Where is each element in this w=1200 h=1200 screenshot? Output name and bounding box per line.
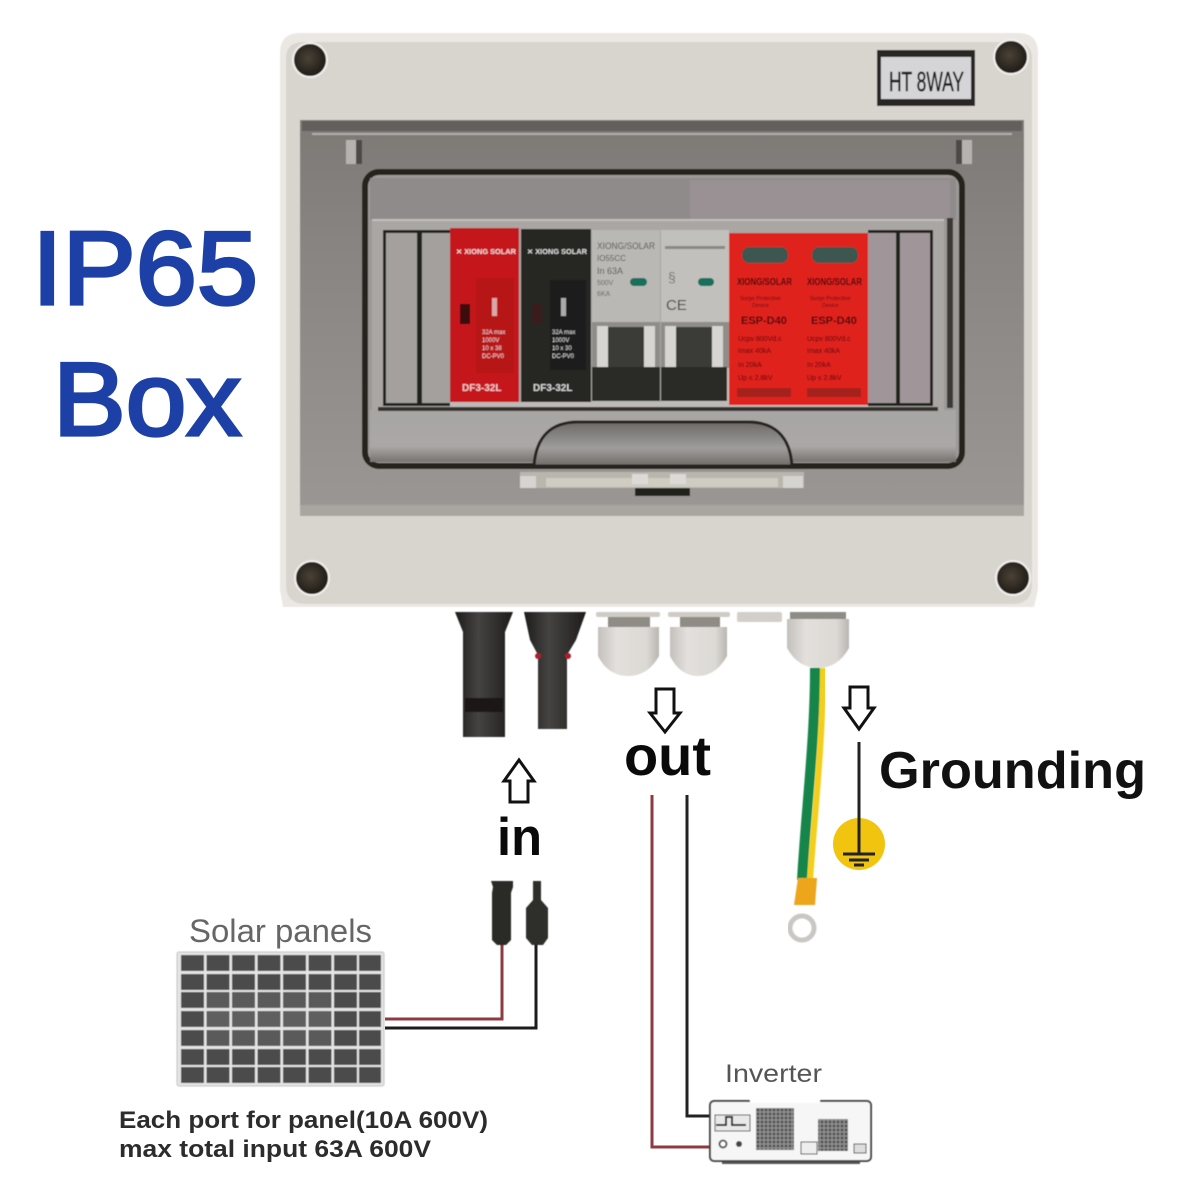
module: DC circuit breaker pole 2: CE [666,297,687,314]
module: surge protective device 2: Device [822,303,839,309]
din rail slots right [868,218,953,408]
module: surge protective device 1: Imax 40kA [738,348,771,355]
window handle arch [534,422,792,466]
module: black surge breaker [521,229,591,402]
window latch [520,472,804,496]
title: IP65 Box: Box [53,342,241,458]
solar panel [177,952,384,1086]
module: surge protective device 1: Ucpv 800Vd.c [738,336,782,343]
module: DC circuit breaker pole 1 [592,230,660,402]
panel port specification: Each port for panel(10A 600V) [119,1107,488,1134]
module: surge protective device 2: Ucpv 800Vd.c [807,336,851,343]
panel wires to connectors [385,944,536,1028]
cable gland 1 [596,612,660,676]
label: Grounding: Grounding [879,742,1146,800]
module: surge protective device 1: ESP-D40 [741,315,787,327]
model label plate: HT 8WAY [889,66,964,97]
arrow: in [504,760,534,802]
module: DC circuit breaker pole 1: IO55CC [597,254,626,263]
module: black surge breaker: 32A max [552,330,575,336]
label: out: out [624,724,711,787]
title: IP65 Box: IP65 [32,211,258,327]
module: red surge breaker: DF3-32L [462,383,501,394]
module: surge protective device 2: XIONG/SOLAR [807,277,863,288]
arrow: out [650,689,680,732]
junction box enclosure [280,33,1038,607]
screw bottom right [996,561,1030,595]
label: in: in [497,808,542,867]
module: surge protective device 2: Surge Protective [810,296,851,302]
grounding wire with ring terminal [790,668,823,940]
module: DC circuit breaker pole 1: 6KA [597,291,611,298]
cable gland 3 [787,612,849,668]
module: red surge breaker: DC-PV0 [482,354,505,360]
module: surge protective device 2: In 20kA [807,362,831,369]
module: DC circuit breaker pole 1: In 63A [597,266,623,276]
module: surge protective device 1: Device [752,303,769,309]
cable gland 2 [668,612,730,676]
module: DC circuit breaker pole 2: § [668,269,676,285]
panel port specification: max total input 63A 600V [119,1136,431,1163]
connector: MC4 large [455,612,513,737]
module: surge protective device 1 [729,233,799,405]
inverter [710,1097,871,1163]
output wires to inverter [652,795,710,1147]
module: red surge breaker: 1000V [482,338,499,344]
module: red surge breaker: ✕ XIONG SOLAR [456,249,516,256]
box connectors and cable glands [455,612,849,737]
module: black surge breaker: ✕ XIONG SOLAR [527,249,587,256]
module: DC circuit breaker pole 1: 500V [597,280,614,287]
module: surge protective device 1: Up ≤ 2.8kV [738,375,773,382]
model label plate [877,50,975,106]
module: surge protective device 2: Imax 40kA [807,348,840,355]
blanking nut [737,612,782,622]
inverter label: Inverter [725,1060,822,1088]
module: DC circuit breaker pole 1: XIONG/SOLAR [597,241,655,251]
solar panels label: Solar panels [189,913,372,949]
module: red surge breaker: 32A max [482,330,505,336]
module: surge protective device 2 [799,233,868,405]
module: black surge breaker: DF3-32L [533,383,572,394]
module: surge protective device 2: Up ≤ 2.8kV [807,375,842,382]
connector: MC4 small [524,612,586,729]
module: DC circuit breaker pole 2 [661,230,729,402]
din rail slots left [383,230,450,406]
inner gasket frame [365,172,962,466]
module: surge protective device 2: ESP-D40 [811,315,857,327]
title: IP65 Box [32,211,258,458]
panel port specification [119,1107,488,1163]
module: surge protective device 1: Surge Protective [740,296,781,302]
module: red surge breaker: 10 x 38 [482,346,502,352]
module: surge protective device 1: In 20kA [738,362,762,369]
module: surge protective device 1: XIONG/SOLAR [737,277,793,288]
screw bottom left [295,561,329,595]
module: black surge breaker: 10 x 30 [552,346,572,352]
grounding line and earth symbol [833,742,885,870]
screw top right [994,40,1028,74]
window panel [300,120,1024,516]
arrow: grounding [844,687,874,729]
module: black surge breaker: DC-PV0 [552,354,575,360]
module: black surge breaker: 1000V [552,338,569,344]
panel MC4 connector pair [491,881,548,945]
module: red surge breaker [450,228,519,402]
screw top left [293,43,327,77]
